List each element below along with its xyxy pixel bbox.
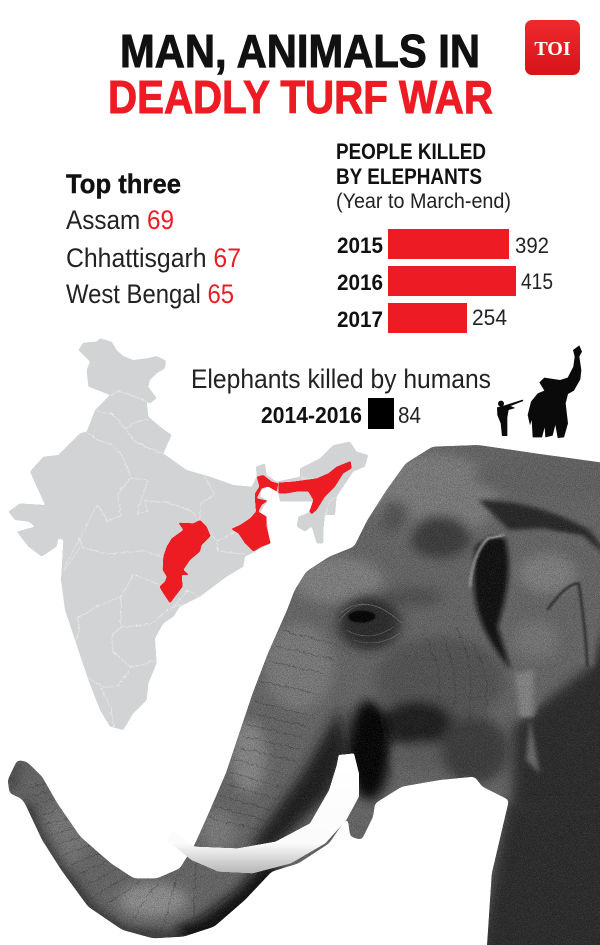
chart heading xyxy=(336,139,511,213)
elephant neck xyxy=(478,803,600,945)
map: country shape xyxy=(8,338,368,730)
title: MAN, ANIMALS IN xyxy=(120,25,480,77)
bar 2015: 2015 xyxy=(337,233,383,258)
bar 2015 xyxy=(337,229,549,259)
chart heading: PEOPLE KILLED xyxy=(336,139,486,164)
map: state borders xyxy=(63,391,335,727)
top three states list xyxy=(66,169,241,309)
top three states list: Chhattisgarh 67 xyxy=(66,243,241,273)
elephants killed by humans stat: 2014-2016 xyxy=(261,402,362,428)
bar chart: people killed by elephants xyxy=(336,139,553,333)
bar 2017: 254 xyxy=(472,305,507,330)
skin grain xyxy=(0,440,600,945)
map of India xyxy=(8,338,368,730)
elephant shoulder shadow xyxy=(506,626,600,809)
chart heading: BY ELEPHANTS xyxy=(336,164,482,189)
bar 2016 xyxy=(337,266,553,296)
bar 2017 xyxy=(337,303,507,333)
icon: TOI logo: TOI xyxy=(534,38,571,60)
title: DEADLY TURF WAR xyxy=(108,71,493,123)
map: Chhattisgarh highlighted xyxy=(159,520,211,603)
top three states list: West Bengal 65 xyxy=(66,279,234,309)
icon: TOI logo xyxy=(525,20,580,75)
bar 2015: 392 xyxy=(515,233,549,258)
map: Assam highlighted xyxy=(278,461,352,514)
bar 2016: 2016 xyxy=(337,270,383,295)
map: West Bengal highlighted xyxy=(231,475,278,552)
elephant body and trunk xyxy=(0,440,600,945)
elephant tusk xyxy=(166,753,359,873)
top three states list: Top three xyxy=(66,169,181,199)
illustration: elephant head xyxy=(0,440,600,945)
icon: small elephant xyxy=(528,345,582,438)
bar 2017: 2017 xyxy=(337,307,383,332)
elephants killed by humans stat: 84 xyxy=(398,402,421,428)
icon: hunter xyxy=(497,400,523,436)
elephants killed by humans stat xyxy=(191,364,491,429)
elephant ear xyxy=(470,500,600,773)
chart heading: (Year to March-end) xyxy=(336,190,511,213)
elephant eye xyxy=(338,597,402,650)
bar 2016: 415 xyxy=(521,269,553,294)
title xyxy=(108,25,493,123)
icon: hunter aiming at elephant xyxy=(497,345,582,438)
top three states list: Assam 69 xyxy=(66,205,174,235)
trunk wrinkles xyxy=(27,627,486,930)
elephants killed by humans stat: Elephants killed by humans xyxy=(191,364,491,394)
